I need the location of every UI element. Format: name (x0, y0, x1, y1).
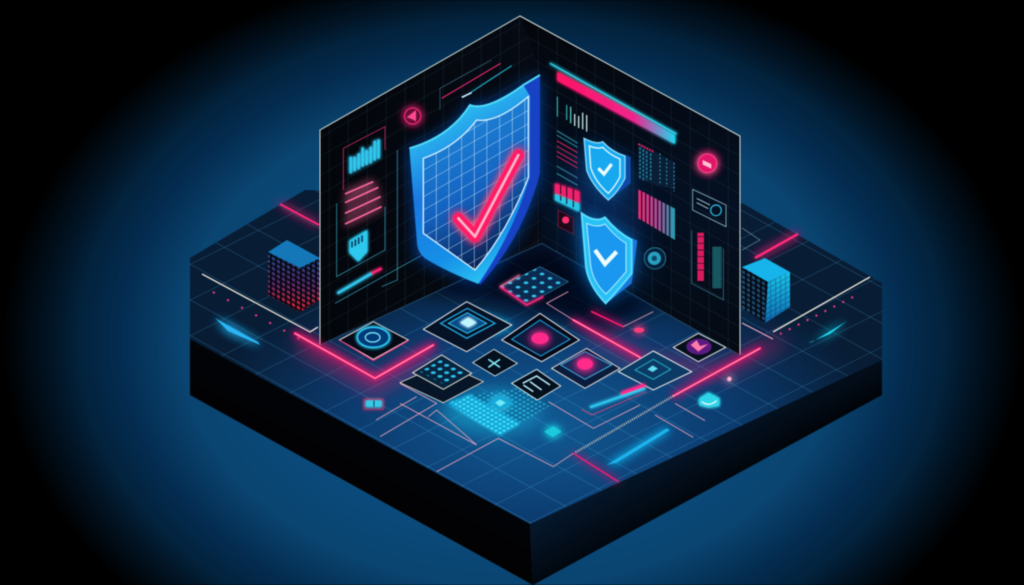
cyan dotted field (448, 388, 550, 435)
right wall (520, 16, 740, 355)
shield depth edge (475, 75, 540, 285)
data columns right wall (638, 143, 675, 192)
floor circuitry, drawn in 3x zoom coordinates (295, 292, 760, 482)
panel: vertical bars right wall (692, 230, 723, 300)
wall blue glow behind shields (567, 150, 643, 297)
pink trace top left (280, 204, 319, 225)
small shield lower (582, 213, 637, 304)
cube left (268, 240, 320, 312)
floor glows (298, 243, 785, 434)
cube top (268, 240, 320, 268)
cyan streak right (808, 321, 847, 343)
floor grid (190, 190, 882, 524)
wall outline (320, 16, 740, 355)
chip: small cross (473, 349, 517, 376)
shield outer glow (409, 75, 540, 283)
dotted slider (582, 385, 647, 415)
pink teal bar group (638, 189, 675, 240)
right floor traces (742, 228, 870, 343)
center teal chip (488, 395, 513, 411)
walls, drawn in 3x zoom coordinates (320, 16, 740, 355)
chip: pink stacked (552, 348, 620, 388)
panel: top wall lines (440, 60, 512, 110)
pink dots (634, 327, 732, 381)
pink glow right trace (585, 325, 785, 378)
cyan streak left (215, 318, 260, 345)
pink neon traces (295, 312, 760, 482)
outline boxes right (742, 228, 760, 250)
small bar chart right wall (557, 97, 587, 132)
cube cyan right face (765, 272, 790, 323)
icon: pink circle alert (405, 108, 421, 124)
dashed trace (575, 396, 673, 453)
envelope icon (699, 393, 719, 407)
shield inner mesh (423, 97, 528, 270)
left floor traces (202, 204, 319, 345)
chip: cyan processor (423, 302, 512, 352)
thin circuit lines (376, 292, 705, 472)
text lines: pink stripes (345, 182, 382, 224)
cube right face (300, 257, 320, 312)
dashboard banner (550, 63, 677, 144)
platform left side (190, 339, 533, 585)
upper shield depth (608, 153, 631, 201)
lower shield check (595, 250, 617, 264)
chip: purple badge (673, 333, 726, 362)
white edge line left (202, 274, 318, 332)
status blocks pink and cyan (555, 183, 579, 212)
pink glow left trace (298, 336, 436, 394)
lower shield depth (606, 235, 637, 304)
white edge line right (773, 277, 870, 332)
teal icon (544, 426, 562, 437)
platform top surface (190, 190, 882, 524)
bright rim highlight (409, 75, 540, 148)
cube left face (268, 252, 300, 312)
red dotted row left (213, 292, 307, 343)
bar chart (351, 139, 379, 173)
lower shield face (582, 213, 632, 303)
panel: bar chart left wall (343, 127, 385, 190)
chip: pink processor (502, 313, 579, 362)
cube right (742, 258, 790, 323)
chip: dotted grid (400, 355, 483, 403)
small shield upper (584, 138, 631, 201)
floor keyboard pad (500, 267, 568, 305)
icon: teal circle (644, 248, 666, 269)
left wall (320, 16, 542, 345)
wall grids (320, 16, 740, 355)
upper shield glow (587, 143, 627, 198)
panel: info card right wall (693, 189, 726, 227)
neon white cores (295, 320, 760, 396)
upper shield face (584, 138, 625, 200)
wall floor seam (320, 243, 740, 355)
pale trace right (742, 323, 773, 339)
chip: white glyph (512, 369, 561, 400)
shadow under shields (410, 243, 660, 330)
platform (190, 190, 882, 585)
cyan glow center (440, 390, 540, 434)
icon: pink check mark (458, 155, 518, 237)
chip: round icon (339, 322, 408, 361)
cube dark left face (742, 267, 768, 323)
panel outlines left wall (335, 150, 425, 303)
lower shield glow (582, 213, 632, 303)
platform right side (530, 360, 882, 585)
shield outer rim (409, 85, 530, 284)
icon: small pink badge (558, 210, 573, 234)
pink dotted row right (780, 297, 853, 334)
dim right half (470, 388, 550, 423)
icon: small cyan shield (349, 230, 367, 262)
small tag icon (364, 399, 383, 409)
main shield (409, 75, 540, 285)
pink trace top right (755, 234, 798, 258)
cyan floor streak (607, 428, 670, 465)
text lines right wall (557, 131, 578, 185)
cube top (742, 258, 790, 282)
progress bar left wall (337, 268, 382, 293)
chip: cyan outline (618, 351, 692, 390)
icon: pink circle top right (698, 154, 717, 173)
upper shield check (598, 164, 612, 174)
bright left half (448, 395, 520, 435)
